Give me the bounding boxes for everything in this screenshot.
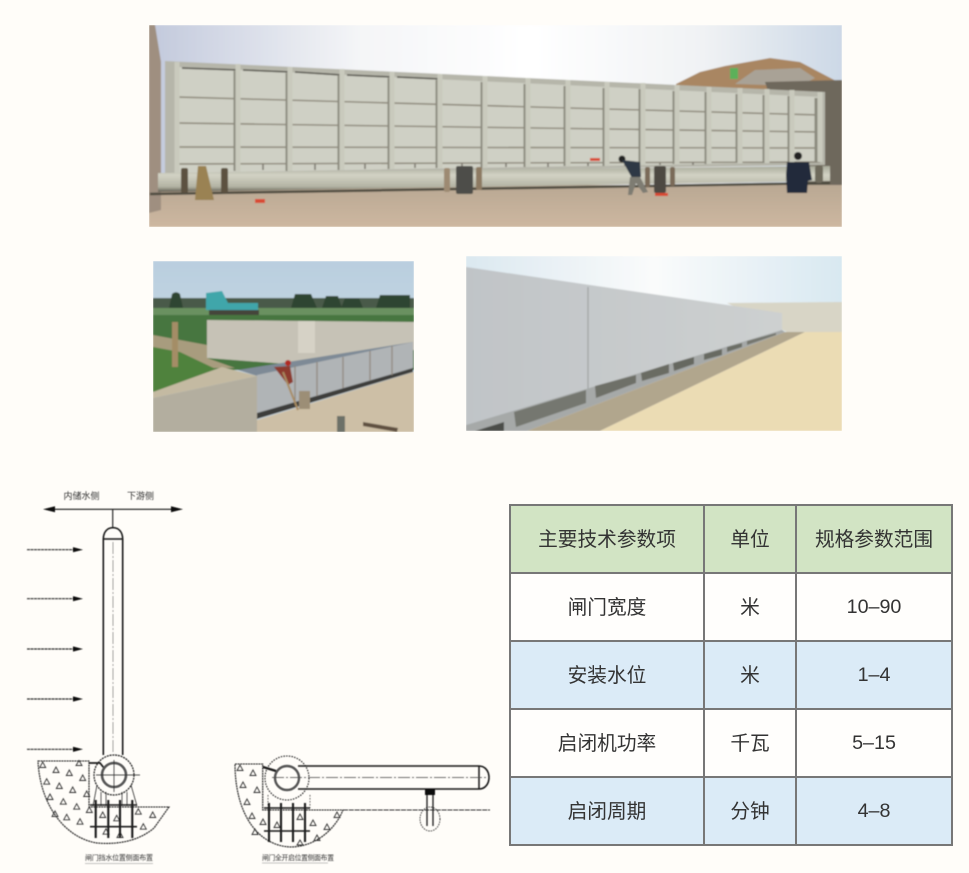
gate leaf upright [103, 509, 123, 755]
gate leaf horizontal [272, 766, 489, 789]
caption: closed position: 闸门挡水位置侧面布置 [85, 853, 153, 862]
hinge [263, 756, 310, 808]
row: open-close cycle: 4–8 [858, 800, 890, 822]
diagram: gate closed, water-retaining position [27, 490, 183, 864]
row: hoist power: 千瓦 [730, 732, 770, 754]
row: gate width [568, 596, 901, 618]
caption: closed position [85, 853, 153, 864]
diagram: gate fully open position [235, 756, 490, 863]
row: open-close cycle: 启闭周期 [568, 800, 646, 822]
caption: open position: 闸门全开启位置侧面布置 [262, 853, 334, 862]
photo: gate lying on site [149, 25, 842, 227]
row: installation water level: 安装水位 [568, 664, 646, 686]
caption: open position [262, 853, 334, 863]
table header row [511, 506, 951, 844]
label: downstream side: 下游侧 [127, 490, 154, 501]
row: hoist power: 启闭机功率 [558, 732, 656, 754]
row: installation water level [511, 642, 951, 708]
row: gate width: 10–90 [847, 596, 901, 618]
table header row: 单位 [730, 528, 770, 550]
arrow: flow direction [43, 506, 183, 512]
foundation [235, 764, 490, 847]
row: gate width: 闸门宽度 [568, 596, 646, 618]
photo: gate installation site [153, 261, 414, 432]
row: hoist power: 5–15 [852, 732, 896, 754]
row: open-close cycle: 分钟 [730, 800, 770, 822]
table header row: 规格参数范围 [815, 528, 933, 550]
row: installation water level: 米 [740, 664, 760, 686]
row: installation water level: 1–4 [858, 664, 890, 686]
label: upstream side: 内储水侧 [63, 490, 100, 501]
hinge and foundation [38, 755, 169, 843]
arrows: water pressure [27, 547, 83, 752]
photo: installed gate wall [466, 256, 842, 431]
table header row: 主要技术参数项 [538, 528, 676, 550]
row: open-close cycle [511, 778, 951, 844]
row: gate width: 米 [740, 596, 760, 618]
gate rest support [420, 789, 440, 831]
row: hoist power [558, 732, 896, 754]
table: main technical parameters [509, 504, 953, 846]
excavator [206, 291, 259, 315]
